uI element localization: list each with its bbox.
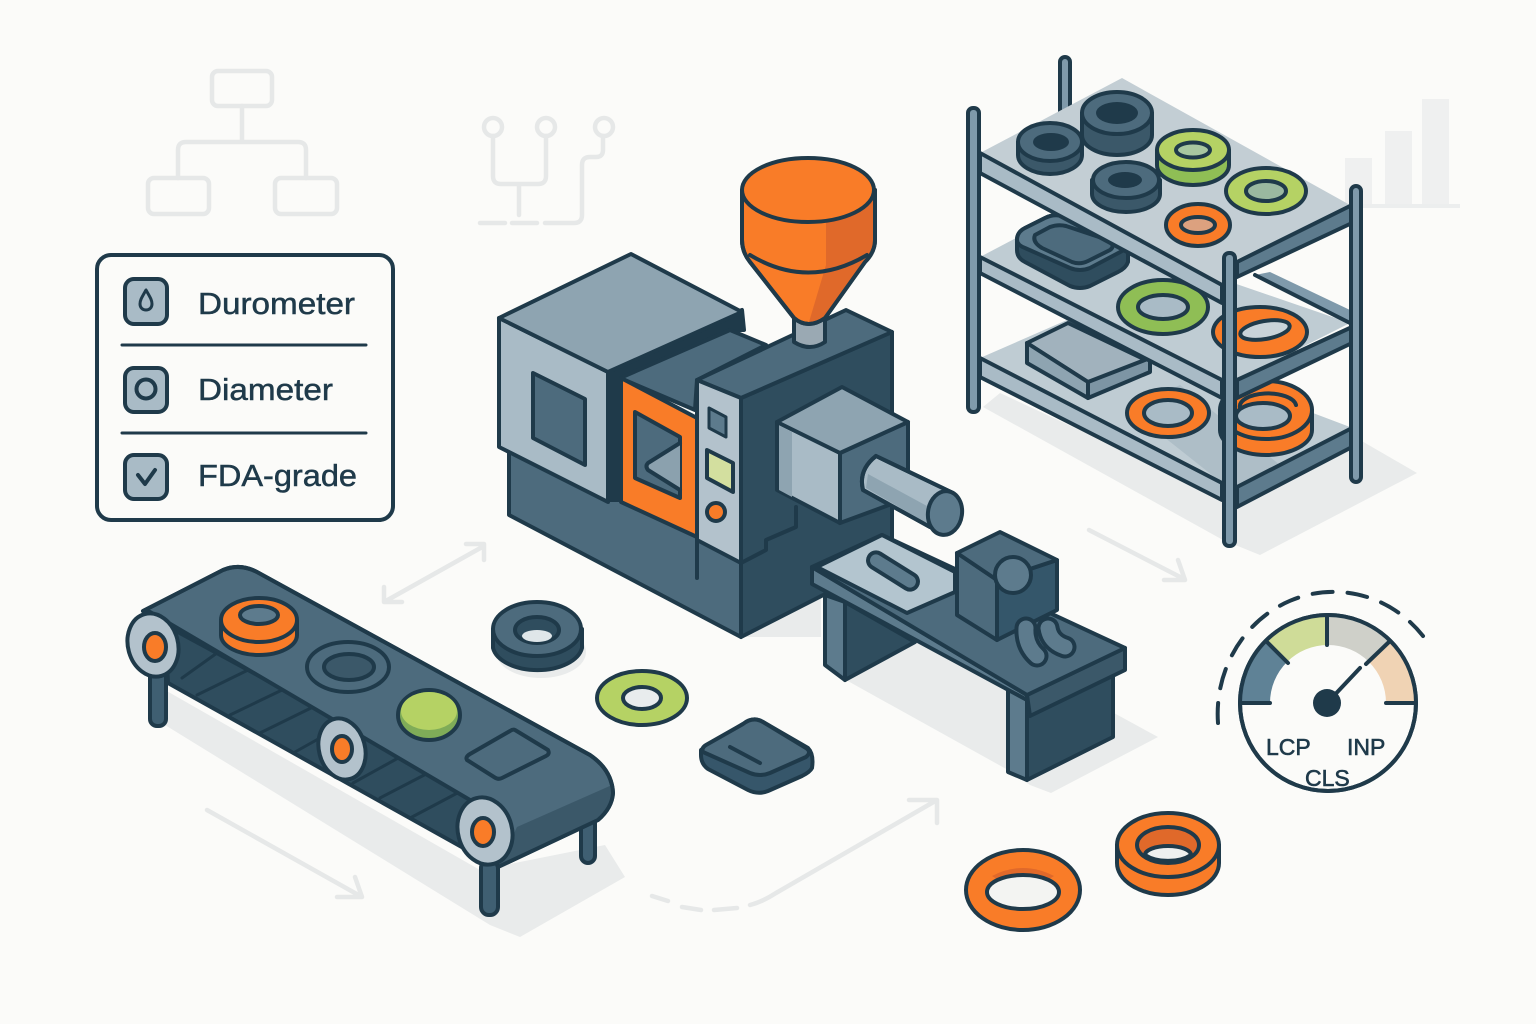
middle shelf (980, 215, 1352, 398)
underside with slats (165, 625, 485, 860)
dark ring C (1092, 162, 1160, 212)
arrow: to gauge (1089, 530, 1185, 580)
label: Durometer: Durometer (198, 286, 355, 321)
left block (499, 254, 742, 502)
press table (812, 532, 1125, 780)
orange ring bottom (1127, 389, 1209, 437)
roller middle (312, 713, 372, 785)
machine shadow (741, 597, 821, 637)
control panel (697, 380, 741, 563)
label: FDA-grade: FDA-grade (198, 458, 357, 493)
conveyor (121, 567, 613, 915)
loose orange thick ring (1117, 813, 1219, 895)
dark ring A (1082, 92, 1152, 155)
orange door (621, 378, 697, 537)
injection molding machine (499, 158, 965, 637)
belt grey ring (307, 642, 389, 692)
gauge rim (1240, 615, 1416, 791)
green thick ring (1157, 130, 1229, 185)
belt (143, 567, 613, 867)
gauge dial (1240, 615, 1416, 791)
top shelf (980, 78, 1352, 303)
gauge label LCP: LCP (1266, 734, 1311, 760)
clamps (1026, 628, 1065, 656)
arrow: double headed (384, 544, 484, 602)
icon: FDA check (125, 455, 167, 499)
clamp upper strip (608, 310, 744, 385)
loose black square (701, 719, 812, 793)
arrow: dashed curve (652, 800, 937, 910)
orange small ring (1166, 204, 1230, 246)
roller left (121, 608, 185, 682)
black tray (1017, 215, 1128, 288)
shelf shadow (983, 393, 1417, 555)
front posts (968, 108, 1361, 546)
gauge label CLS: CLS (1305, 765, 1350, 791)
gauge hub (1313, 689, 1341, 717)
slab (1027, 323, 1150, 398)
control column top (697, 310, 892, 398)
label: Diameter: Diameter (198, 372, 333, 407)
table top (812, 535, 1125, 716)
belt green disc (398, 690, 460, 740)
press head (957, 532, 1057, 640)
neck (794, 316, 825, 347)
gauge (1218, 592, 1423, 791)
gauge segments (1240, 615, 1416, 703)
loose green ring (597, 671, 687, 725)
green ring middle (1118, 280, 1208, 334)
ghost icon: circuit (480, 118, 613, 223)
injection unit box (777, 387, 908, 523)
left leg (825, 595, 915, 680)
barrel (862, 456, 965, 537)
ghost icon: org chart (148, 71, 337, 214)
shelf unit (968, 57, 1417, 555)
belt orange ring (221, 598, 297, 655)
icon: durometer drop (125, 279, 167, 324)
ghost icon: bar chart (1340, 99, 1460, 208)
bottom shelf (980, 320, 1352, 507)
gauge label INP: INP (1347, 734, 1385, 760)
plate (817, 535, 955, 613)
roller right (450, 791, 520, 871)
arrow: under conveyor (207, 810, 362, 897)
hopper (742, 158, 875, 324)
icon: diameter circle (125, 368, 167, 412)
dark right side (741, 332, 892, 637)
panel: spec checklist (97, 255, 393, 520)
conveyor legs (150, 670, 595, 915)
stepped seam (741, 507, 796, 563)
gauge needle (1327, 668, 1360, 703)
clamp top (620, 330, 766, 410)
orange thick ring bottom (1220, 381, 1312, 455)
conveyor shadow (165, 690, 625, 937)
right leg (1008, 670, 1113, 780)
orange ring middle (1213, 307, 1307, 357)
table shadow (846, 640, 1158, 793)
green flat ring (1226, 168, 1306, 214)
gauge ticks (1240, 615, 1416, 703)
dark ring B (1018, 123, 1082, 174)
machine base (509, 440, 741, 637)
loose black ring (493, 602, 586, 678)
gauge dashed arc (1218, 592, 1423, 723)
back post (1060, 57, 1070, 127)
seam line (695, 535, 699, 578)
loose orange ring (966, 850, 1080, 930)
belt square (466, 730, 549, 779)
